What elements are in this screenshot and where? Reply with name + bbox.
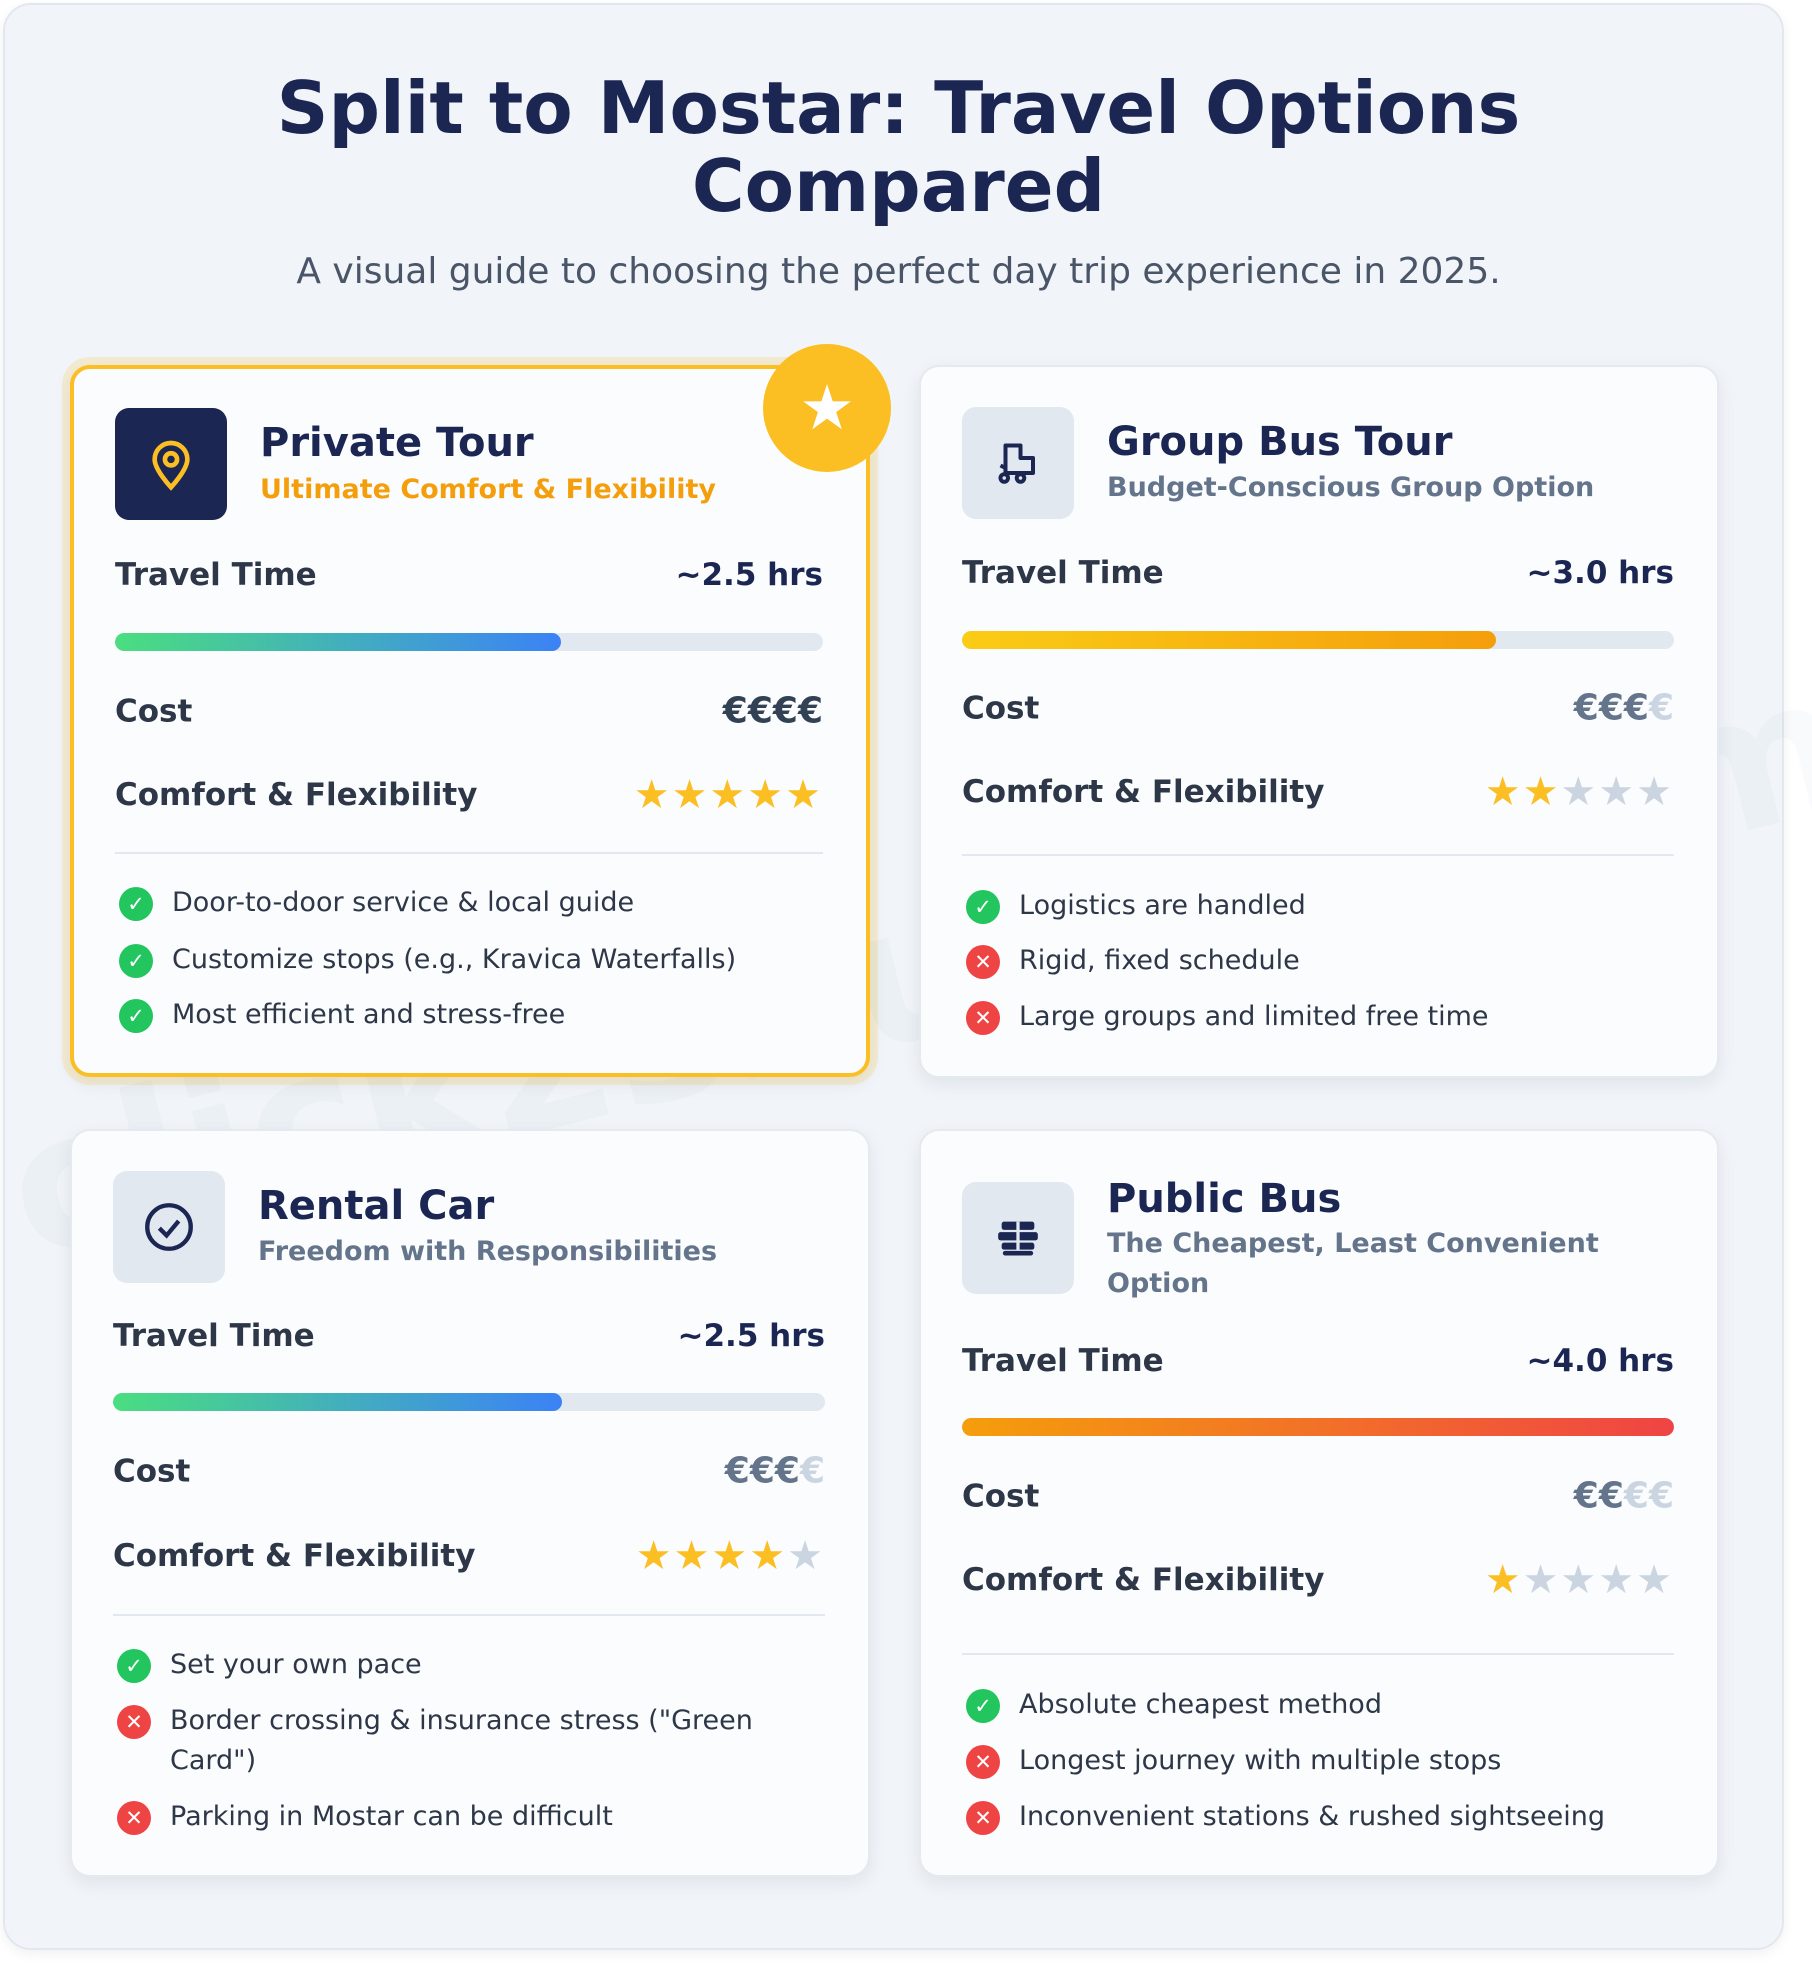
heading: Group Bus Tour: [1107, 419, 1452, 465]
comfort row: ★★★★★: [1485, 1557, 1674, 1603]
title: [277, 66, 1520, 228]
pros and cons list: Large groups and limited free time: [1019, 1001, 1489, 1032]
cost row: [115, 690, 823, 732]
subtitle: A visual guide to choosing the perfect day trip experience in 2025.: [296, 251, 1501, 292]
travel time bar: [962, 1418, 1674, 1436]
cost row: Cost: [115, 693, 192, 729]
comfort row: ★★★★★: [634, 772, 823, 818]
heading: Public Bus: [1107, 1176, 1341, 1222]
travel time row: Travel Time: [113, 1318, 315, 1354]
pros and cons list: ✓: [125, 1654, 143, 1678]
pros and cons list: Border crossing & insurance stress ("Green Card"): [170, 1705, 753, 1776]
pros and cons list: Rigid, fixed schedule: [1019, 945, 1300, 976]
icon: star badge: ★: [799, 371, 855, 444]
travel time row: Travel Time: [115, 557, 317, 593]
pros and cons list: ✕: [125, 1710, 143, 1734]
travel time row: [113, 1318, 825, 1354]
pros and cons list: Inconvenient stations & rushed sightseeing: [1019, 1801, 1605, 1832]
pros list: Door-to-door service & local guide: [172, 887, 634, 918]
travel time row: [962, 555, 1674, 591]
cost row: €€€€: [723, 690, 823, 732]
panel: private tour: [70, 365, 870, 1077]
comfort row: [962, 769, 1674, 815]
panel: rental car: [70, 1129, 870, 1877]
pros list: ✓: [127, 949, 145, 973]
comfort row: [113, 1533, 825, 1579]
subheading: Budget-Conscious Group Option: [1107, 472, 1594, 503]
travel time row: Travel Time: [962, 1343, 1164, 1379]
cost row: €€€€: [725, 1450, 825, 1492]
pros list: [119, 887, 736, 1033]
pros and cons list: Logistics are handled: [1019, 890, 1306, 921]
travel time row: [962, 1343, 1674, 1379]
title: Split to Mostar: Travel Options: [277, 66, 1520, 150]
pros and cons list: Set your own pace: [170, 1649, 422, 1680]
pros and cons list: ✓: [974, 1694, 992, 1718]
icon: bus: [962, 1182, 1074, 1294]
cost row: €€€€: [1574, 688, 1674, 728]
icon: check circle: [113, 1171, 225, 1283]
heading: private tour: Private Tour: [260, 420, 534, 466]
cost row: [962, 688, 1674, 728]
pros list: Most efficient and stress-free: [172, 999, 565, 1030]
pros and cons list: ✕: [125, 1806, 143, 1830]
comfort row: ★★★★★: [1485, 769, 1674, 815]
travel time row: ~4.0 hrs: [1526, 1343, 1674, 1379]
travel time bar: [962, 631, 1674, 649]
pros and cons list: ✓: [974, 895, 992, 919]
cost row: [962, 1476, 1674, 1516]
pros and cons list: Longest journey with multiple stops: [1019, 1745, 1501, 1776]
pros and cons list: ✕: [974, 1750, 992, 1774]
pros and cons list: Absolute cheapest method: [1019, 1689, 1382, 1720]
pros and cons list: Parking in Mostar can be difficult: [170, 1801, 613, 1832]
pros and cons list: ✕: [974, 1806, 992, 1830]
pros and cons list: ✕: [974, 1006, 992, 1030]
comfort row: Comfort & Flexibility: [113, 1538, 475, 1574]
subheading: Freedom with Responsibilities: [258, 1236, 717, 1267]
pros and cons list: [966, 1689, 1605, 1835]
pros list: ✓: [127, 892, 145, 916]
panel: public bus: [919, 1129, 1719, 1877]
comfort row: Comfort & Flexibility: [962, 1562, 1324, 1598]
comfort row: ★★★★★: [636, 1533, 825, 1579]
pros and cons list: [117, 1649, 753, 1835]
subheading: The Cheapest, Least Convenient Option: [1107, 1228, 1599, 1299]
pros and cons list: [966, 890, 1489, 1035]
pros list: ✓: [127, 1004, 145, 1028]
icon: star badge: [763, 344, 891, 472]
cost row: Cost: [113, 1453, 190, 1489]
pros and cons list: ✕: [974, 950, 992, 974]
cost row: €€€€: [1574, 1476, 1674, 1516]
heading: Rental Car: [258, 1183, 494, 1229]
cost row: Cost: [962, 690, 1039, 726]
travel time row: ~2.5 hrs: [676, 557, 823, 593]
icon: cart: [962, 407, 1074, 519]
cost row: Cost: [962, 1478, 1039, 1514]
comfort row: Comfort & Flexibility: [962, 774, 1324, 810]
comfort row: [962, 1557, 1674, 1603]
cost row: [113, 1450, 825, 1492]
icon: location pin: [115, 408, 227, 520]
travel time row: ~3.0 hrs: [1526, 555, 1674, 591]
panel: group bus tour: [919, 365, 1719, 1078]
subheading: Ultimate Comfort & Flexibility: [260, 474, 716, 505]
comfort row: [115, 772, 823, 818]
travel time row: Travel Time: [962, 555, 1164, 591]
travel time bar: [113, 1393, 825, 1411]
travel time row: [115, 557, 823, 593]
travel time row: ~2.5 hrs: [678, 1318, 825, 1354]
title: Compared: [692, 144, 1105, 228]
travel time bar: [115, 633, 823, 651]
comfort row: Comfort & Flexibility: [115, 777, 477, 813]
pros list: Customize stops (e.g., Kravica Waterfalls): [172, 944, 736, 975]
